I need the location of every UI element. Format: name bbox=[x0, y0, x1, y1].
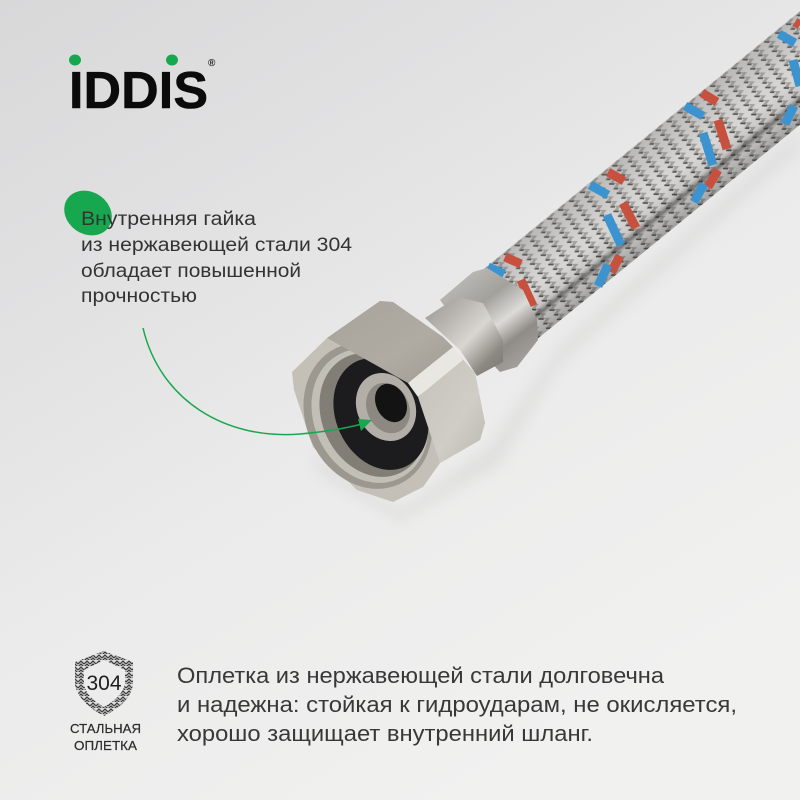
description text: и надежна: стойкая к гидроударам, не окисляется, bbox=[177, 692, 737, 717]
metal insert bbox=[345, 363, 427, 451]
registered mark: ® bbox=[208, 58, 216, 69]
description text bbox=[177, 663, 737, 746]
badge label: ОПЛЕТКА bbox=[74, 738, 137, 753]
shadow under hose and nut bbox=[310, 130, 800, 522]
insert hole bbox=[369, 379, 413, 427]
badge label bbox=[70, 721, 141, 753]
callout text: обладает повышенной bbox=[81, 261, 301, 282]
green accent blob bbox=[55, 181, 121, 245]
black gasket bbox=[316, 342, 446, 486]
insert bore bbox=[358, 376, 418, 440]
hose assembly photo bbox=[280, 2, 800, 522]
thread ring light bbox=[290, 330, 450, 502]
shield icon bbox=[75, 651, 133, 716]
logo green dots bbox=[69, 54, 178, 66]
nut threaded opening bbox=[280, 322, 456, 510]
nut bright edge bbox=[408, 347, 463, 397]
neck of fitting bbox=[425, 297, 503, 376]
callout text: Внутренняя гайка bbox=[81, 209, 256, 230]
description text: хорошо защищает внутренний шланг. bbox=[177, 721, 593, 746]
callout text: из нержавеющей стали 304 bbox=[81, 235, 352, 256]
braided hose bbox=[477, 2, 800, 342]
thread ring dark bbox=[300, 335, 446, 495]
red and blue hose stripes bbox=[488, 22, 800, 306]
badge label: СТАЛЬНАЯ bbox=[70, 721, 141, 736]
nut top face bbox=[327, 301, 453, 383]
hex nut body bbox=[292, 301, 485, 502]
callout text: прочностью bbox=[81, 286, 197, 307]
nut right face bbox=[418, 360, 485, 463]
logo wordmark: IDDIS bbox=[69, 62, 208, 120]
callout text bbox=[81, 209, 352, 307]
collar of fitting bbox=[440, 268, 538, 372]
shield inner plate bbox=[84, 660, 125, 707]
shield number: 304 bbox=[86, 672, 122, 695]
logo: IDDIS bbox=[69, 54, 216, 120]
callout: inner nut bbox=[55, 181, 352, 307]
arrow pointing to inner nut bbox=[143, 328, 372, 435]
badge: 304 steel braid bbox=[70, 651, 141, 753]
description text: Оплетка из нержавеющей стали долговечна bbox=[177, 663, 665, 688]
